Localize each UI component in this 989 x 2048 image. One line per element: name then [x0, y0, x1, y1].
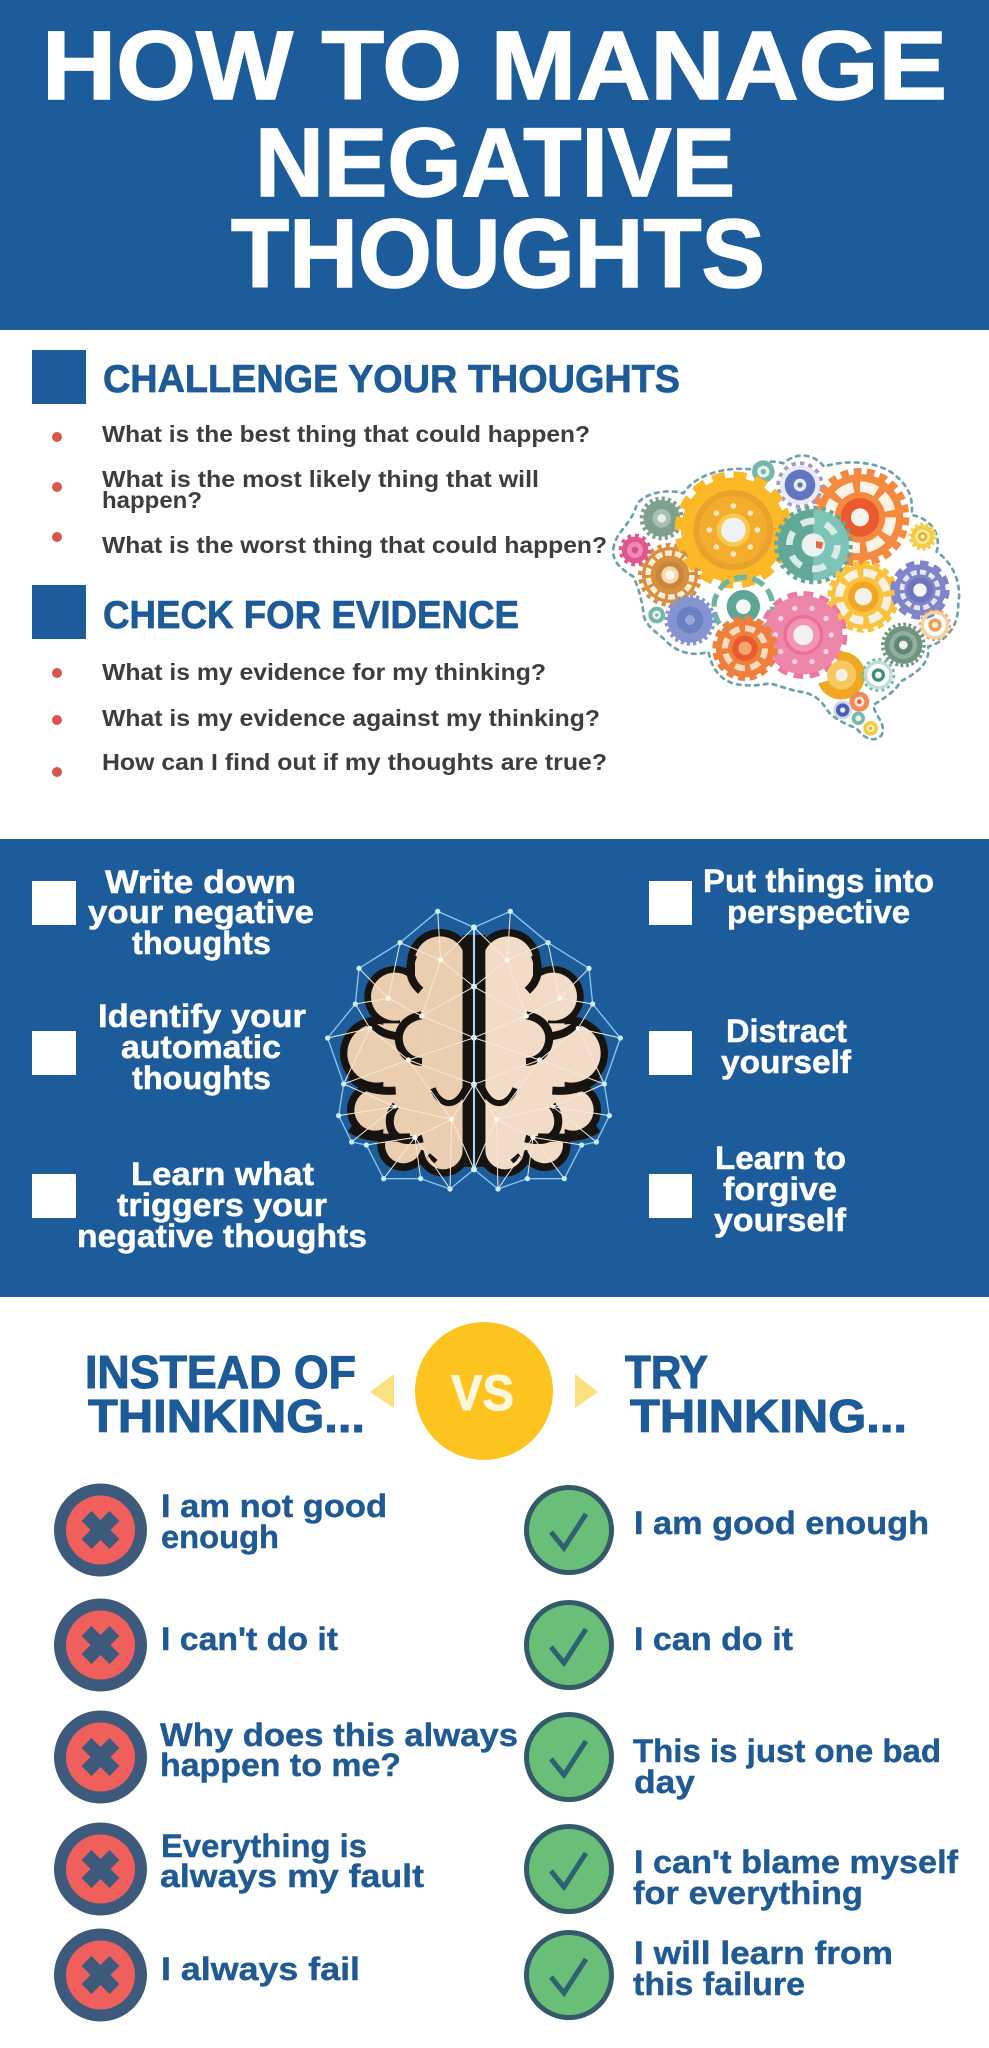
icon: cross [54, 1710, 147, 1804]
panel: header [0, 0, 989, 330]
heading: challenge your thoughts: CHALLENGE YOUR THOUGHTS [103, 358, 680, 401]
heading: try thinking: THINKING... [630, 1390, 907, 1442]
row: Why does this always happen to me? [54, 1710, 518, 1804]
row: Why does this always happen to me?: Why does this always [160, 1717, 518, 1753]
question list: challenge: What is the worst thing that could happen? [102, 532, 607, 558]
item: learn what triggers your negative thoughts: triggers your [117, 1187, 327, 1223]
row: I will learn from this failure [526, 1932, 893, 2018]
row: I am good enough: I am good enough [634, 1505, 929, 1541]
item: put things into perspective [649, 863, 934, 930]
question list: challenge: happen? [102, 487, 202, 513]
row: I can do it: I can do it [634, 1621, 793, 1657]
heading: instead of thinking: INSTEAD OF [85, 1346, 356, 1398]
item: write down your negative thoughts [32, 864, 314, 961]
row: I can't blame myself for everything [526, 1826, 958, 1912]
row: I will learn from this failure: this failure [633, 1966, 805, 2002]
icon: check [526, 1602, 612, 1688]
item: write down your negative thoughts: thoughts [132, 925, 271, 961]
row: I will learn from this failure: I will learn from [634, 1935, 893, 1971]
row: This is just one bad day: day [634, 1764, 695, 1800]
icon: brain made of gears [613, 456, 959, 739]
item: learn what triggers your negative thoughts: negative thoughts [77, 1218, 367, 1254]
icon: cross [54, 1598, 147, 1692]
row: I am not good enough [54, 1484, 387, 1576]
item: distract yourself: yourself [721, 1044, 851, 1080]
row: I can't do it: I can't do it [161, 1621, 338, 1657]
row: I am not good enough: I am not good [161, 1488, 387, 1524]
icon: check [526, 1714, 612, 1800]
arrow: right [575, 1374, 598, 1408]
icon: check [526, 1932, 612, 2018]
title: HOW TO MANAGE [42, 11, 947, 120]
question list: evidence: What is my evidence against my thinking? [102, 705, 600, 731]
row: I can't blame myself for everything: I can't blame myself [634, 1844, 958, 1880]
row: Everything is always my fault: always my fault [160, 1858, 424, 1894]
panel: check for evidence [32, 585, 607, 777]
heading: instead of thinking: THINKING... [88, 1390, 365, 1442]
badge: VS: VS [451, 1365, 514, 1421]
row: This is just one bad day: This is just one bad [633, 1733, 941, 1769]
question list: evidence: How can I find out if my thoughts are true? [102, 749, 607, 775]
row: I can't blame myself for everything: for everything [633, 1875, 863, 1911]
question list: evidence: What is my evidence for my thinking? [102, 659, 546, 685]
item: identify your automatic thoughts [32, 998, 306, 1096]
row: I always fail [54, 1928, 360, 2022]
title: NEGATIVE [255, 108, 735, 217]
row: Everything is always my fault [54, 1822, 424, 1916]
heading: try thinking [625, 1346, 907, 1442]
icon: cross [54, 1822, 147, 1916]
question list: challenge: What is the most likely thing that will [102, 466, 539, 492]
heading: check for evidence: CHECK FOR EVIDENCE [103, 594, 519, 637]
row: I am good enough [526, 1488, 929, 1572]
question list: challenge: What is the best thing that could happen? [102, 421, 590, 447]
heading: try thinking: TRY [625, 1346, 708, 1398]
row: I can do it [526, 1602, 793, 1688]
item: identify your automatic thoughts: Identify your [98, 998, 306, 1034]
item: distract yourself: Distract [726, 1013, 847, 1049]
item: identify your automatic thoughts: automatic [121, 1029, 281, 1065]
item: put things into perspective: Put things into [703, 863, 934, 899]
icon: networked brain [325, 909, 623, 1192]
item: learn to forgive yourself [649, 1140, 846, 1238]
item: learn to forgive yourself: forgive [723, 1171, 837, 1207]
panel: action list [0, 839, 989, 1297]
badge: VS [415, 1322, 553, 1460]
icon: check [526, 1826, 612, 1912]
item: learn what triggers your negative thoughts [32, 1156, 367, 1254]
item: write down your negative thoughts: your negative [88, 894, 314, 930]
arrow: left [370, 1374, 394, 1408]
panel: challenge your thoughts [32, 350, 680, 558]
row: Everything is always my fault: Everything is [161, 1828, 367, 1864]
item: write down your negative thoughts: Write down [105, 864, 296, 900]
icon: cross [54, 1484, 147, 1576]
row: This is just one bad day [526, 1714, 941, 1800]
row: I always fail: I always fail [161, 1951, 360, 1987]
title: THOUGHTS [231, 199, 765, 308]
item: learn to forgive yourself: Learn to [715, 1140, 846, 1176]
item: learn what triggers your negative thoughts: Learn what [131, 1156, 314, 1192]
question list: evidence [52, 659, 607, 777]
item: identify your automatic thoughts: thoughts [132, 1060, 271, 1096]
item: learn to forgive yourself: yourself [714, 1202, 846, 1238]
row: Why does this always happen to me?: happen to me? [160, 1747, 401, 1783]
item: distract yourself [649, 1013, 851, 1080]
item: put things into perspective: perspective [727, 894, 910, 930]
row: I am not good enough: enough [161, 1519, 279, 1555]
icon: check [526, 1488, 612, 1572]
row: I can't do it [54, 1598, 338, 1692]
heading: instead of thinking [85, 1346, 365, 1442]
icon: cross [54, 1928, 147, 2022]
question list: challenge [52, 421, 607, 558]
title [42, 11, 947, 308]
